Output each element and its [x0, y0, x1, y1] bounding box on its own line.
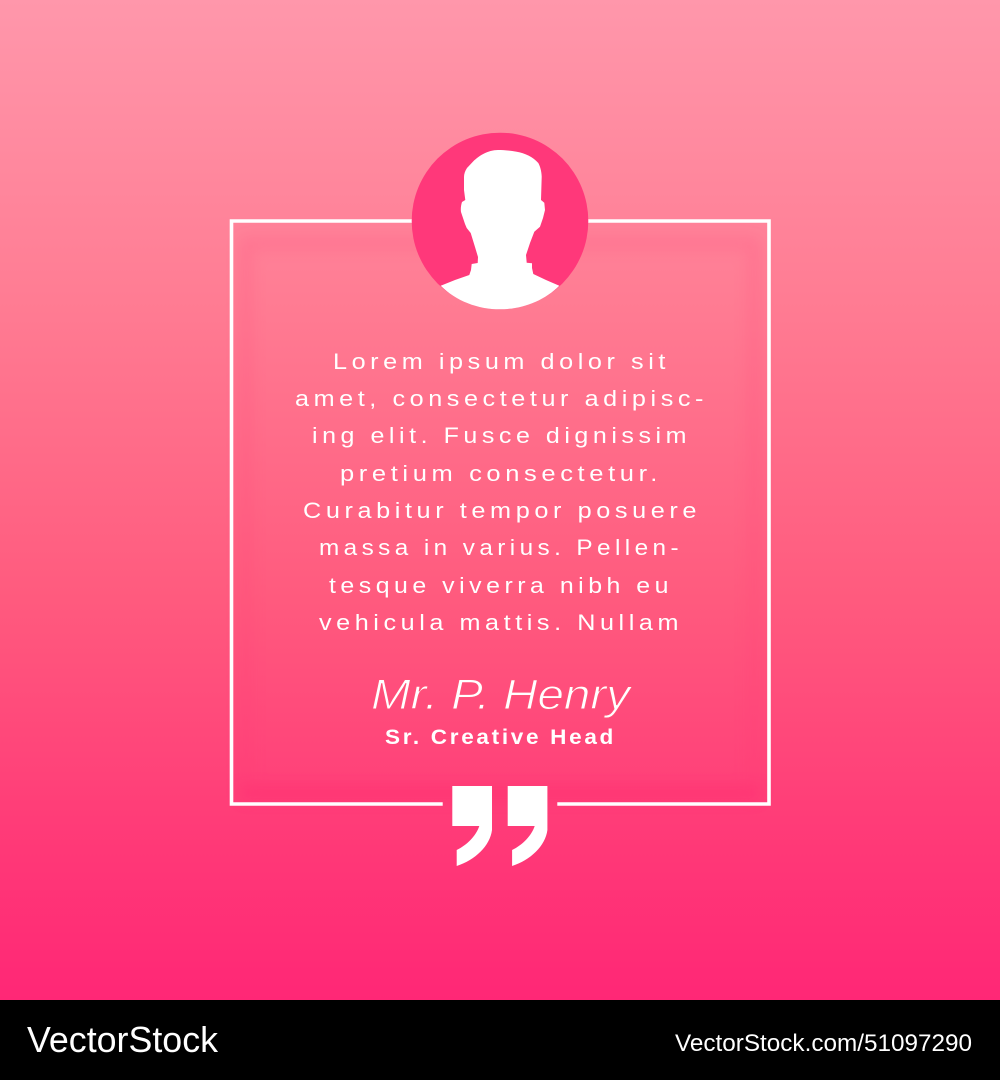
- footer logo text: VectorStock: [27, 1019, 219, 1060]
- footer image id: VectorStock.com/51097290: [675, 1030, 972, 1057]
- author role: Sr. Creative Head: [385, 726, 616, 749]
- quote text block: amet, consectetur adipisc-: [295, 386, 708, 411]
- quote text block: Curabitur tempor posuere: [303, 498, 701, 523]
- quote text block: ing elit. Fusce dignissim: [312, 423, 691, 448]
- quote text block: pretium consectetur.: [340, 461, 662, 486]
- footer bar: [0, 1000, 1000, 1080]
- quote text block: tesque viverra nibh eu: [329, 573, 673, 598]
- author name: Mr. P. Henry: [371, 671, 633, 719]
- quote text block: [295, 349, 708, 635]
- quote text block: massa in varius. Pellen-: [319, 535, 683, 560]
- panel frame: [232, 221, 769, 804]
- quote text block: vehicula mattis. Nullam: [319, 610, 683, 635]
- icon: avatar: [412, 133, 588, 309]
- panel: soft testimonial card: [240, 243, 760, 800]
- icon: closing quotation marks: [452, 786, 547, 866]
- quote text block: Lorem ipsum dolor sit: [333, 349, 670, 374]
